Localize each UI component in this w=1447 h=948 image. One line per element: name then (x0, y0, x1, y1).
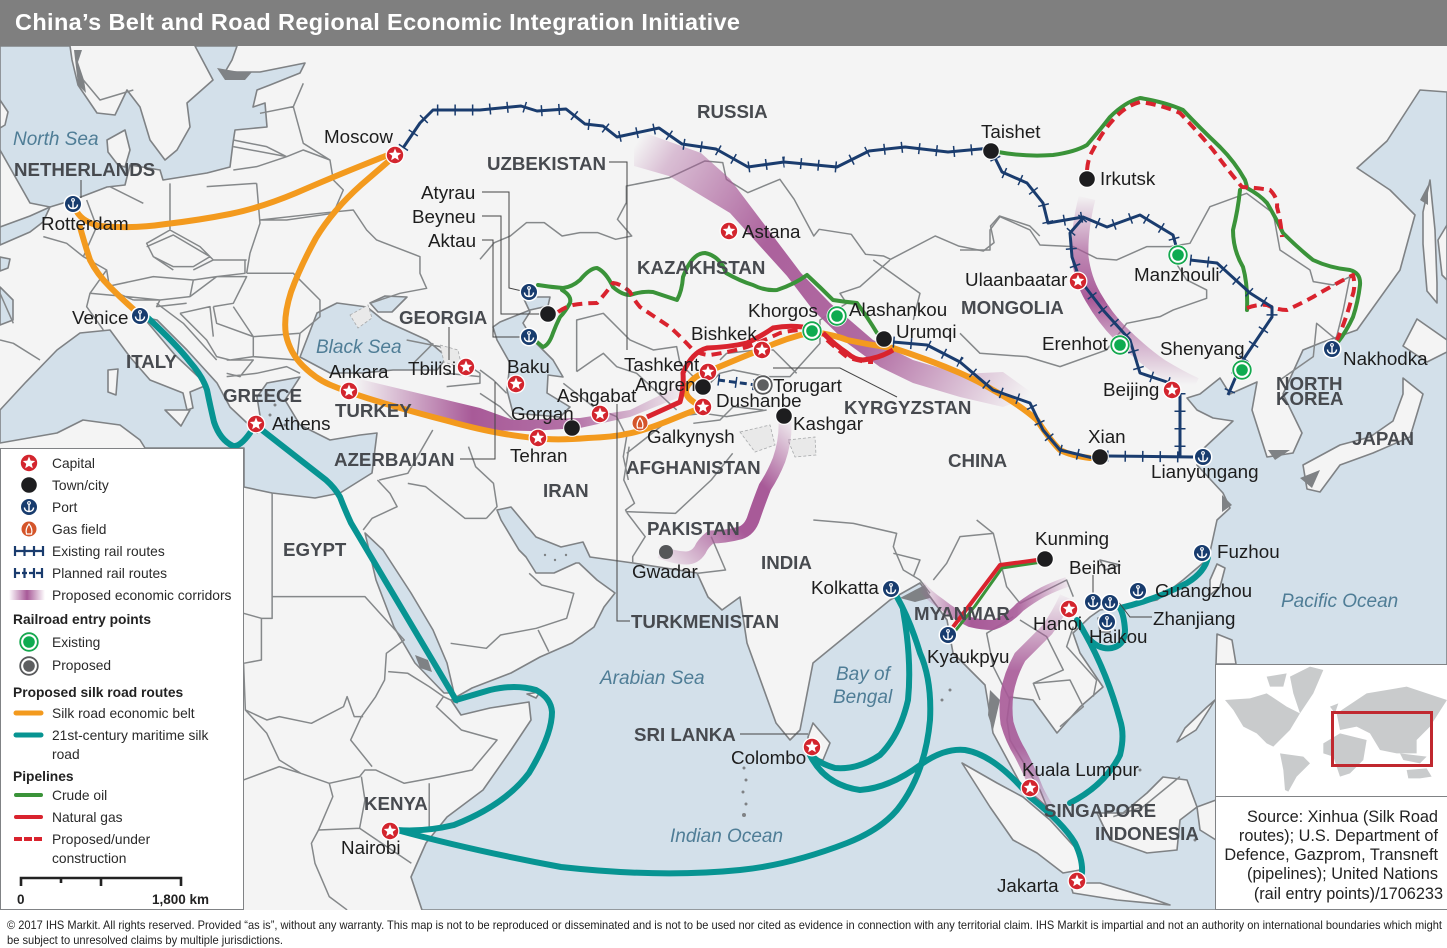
source text: Source: Xinhua (Silk Road (1247, 808, 1438, 826)
natural gas pipelines (647, 326, 1037, 627)
legend item: natural gas (16, 810, 123, 825)
port markers (64, 194, 1342, 644)
country labels: MONGOLIA (961, 297, 1064, 318)
country labels: NETHERLANDS (14, 159, 155, 180)
country borders: South-East Asia (813, 520, 1180, 817)
proposed pipelines (558, 102, 1354, 362)
legend item: crude oil: Crude oil (52, 788, 107, 803)
city labels: Atyrau (421, 182, 475, 203)
source text: routes); U.S. Department of (1239, 827, 1438, 845)
scale bar: 0 (17, 892, 25, 907)
city labels: Beyneu (412, 206, 476, 227)
city labels (41, 121, 1428, 896)
title bar: China’s Belt and Road Regional Economic Integration Initiative (15, 9, 740, 35)
sea labels: Arabian Sea (599, 668, 705, 689)
source text: (pipelines); United Nations (1247, 865, 1438, 883)
city labels: Galkynysh (647, 426, 735, 447)
legend heading: railroad entry points: Railroad entry points (13, 612, 151, 627)
leader lines (81, 162, 1152, 734)
city labels: Aktau (428, 230, 476, 251)
city labels: Kashgar (793, 413, 863, 434)
legend item: proposed entry point (18, 656, 111, 676)
corridor: Kolkata to Kunming (920, 582, 1067, 625)
country labels: JAPAN (1352, 428, 1414, 449)
country labels: AFGHANISTAN (626, 457, 761, 478)
city labels: Tehran (510, 445, 567, 466)
legend item: capital (20, 454, 95, 472)
city labels: Zhanjiang (1153, 608, 1236, 629)
legend item: maritime silk road: 21st-century maritime silk (52, 728, 209, 743)
country labels: IRAN (543, 480, 589, 501)
city labels: Kuala Lumpur (1022, 759, 1139, 780)
country labels: KAZAKHSTAN (637, 257, 765, 278)
city labels: Ankara (329, 361, 389, 382)
source text: (rail entry points)/1706233 (1254, 885, 1443, 903)
country labels: INDONESIA (1095, 823, 1199, 844)
city labels: Moscow (324, 126, 393, 147)
country labels: ITALY (126, 351, 177, 372)
city labels: Kolkatta (811, 577, 879, 598)
city labels: Gwadar (632, 561, 698, 582)
sea labels: Indian Ocean (670, 826, 783, 847)
city labels: Urumqi (896, 321, 957, 342)
country labels: EGYPT (283, 539, 347, 560)
source text: Defence, Gazprom, Transneft (1224, 846, 1438, 864)
legend item: proposed economic corridors: Proposed economic corridors (52, 588, 232, 603)
legend item: crude oil (16, 788, 107, 803)
city labels: Baku (507, 356, 550, 377)
country labels (14, 101, 1414, 844)
city labels: Fuzhou (1217, 541, 1280, 562)
sea labels: Pacific Ocean (1281, 591, 1398, 612)
economic corridors (355, 129, 1195, 808)
city labels: Manzhouli (1134, 264, 1220, 285)
legend item: proposed pipeline: Proposed/under (52, 832, 151, 847)
city labels: Erenhot (1042, 333, 1109, 354)
city labels: Kunming (1035, 528, 1109, 549)
city labels: Nairobi (341, 837, 400, 858)
city labels: Jakarta (997, 875, 1059, 896)
legend item: gas field: Gas field (52, 522, 106, 537)
city labels: Beijing (1103, 379, 1159, 400)
world locator map (1225, 667, 1447, 792)
21st-century maritime silk road (148, 318, 1208, 873)
legend item: natural gas: Natural gas (52, 810, 123, 825)
legend item: port: Port (52, 500, 77, 515)
country labels: NORTH (1276, 373, 1342, 394)
city labels: Torugart (773, 375, 843, 396)
city labels: Hanoi (1033, 613, 1082, 634)
city labels: Irkutsk (1100, 168, 1156, 189)
silk road economic belt (77, 153, 1090, 458)
legend item: existing entry point (18, 632, 100, 652)
country labels: KENYA (364, 793, 428, 814)
corridor: Russia to China (634, 129, 1035, 407)
legend item: proposed pipeline: construction (52, 851, 126, 866)
city labels: Taishet (981, 121, 1041, 142)
country labels: AZERBAIJAN (334, 449, 454, 470)
country labels: KOREA (1276, 388, 1344, 409)
country labels: KYRGYZSTAN (844, 397, 971, 418)
city labels: Xian (1088, 426, 1126, 447)
country labels: INDIA (761, 552, 812, 573)
sea labels: North Sea (13, 129, 99, 150)
icon: gas field (632, 414, 648, 432)
country labels: SRI LANKA (634, 724, 736, 745)
city labels: Astana (742, 221, 801, 242)
source text (1224, 808, 1443, 903)
city labels: Athens (272, 413, 330, 434)
city labels: Ashgabat (557, 385, 637, 406)
existing rail routes (403, 106, 1272, 458)
city labels: Shenyang (1160, 338, 1245, 359)
legend item: proposed entry point: Proposed (52, 658, 111, 673)
city labels: Beihai (1069, 557, 1121, 578)
country labels: CHINA (948, 450, 1007, 471)
city labels: Ulaanbaatar (965, 269, 1067, 290)
legend item: maritime silk road: road (52, 747, 80, 762)
legend item: silk road economic belt: Silk road economic belt (52, 706, 195, 721)
country labels: TURKMENISTAN (631, 611, 779, 632)
legend item: maritime silk road (16, 728, 209, 762)
railroad entry points (752, 244, 1252, 396)
city labels: Khorgos (748, 300, 818, 321)
city labels: Lianyungang (1151, 461, 1259, 482)
city labels: Guangzhou (1155, 580, 1252, 601)
legend item: planned rail routes: Planned rail routes (52, 566, 167, 581)
city labels: Tbilisi (408, 358, 456, 379)
country labels: GREECE (223, 385, 302, 406)
legend item: town or city (20, 476, 109, 494)
city labels: Dushanbe (716, 390, 802, 411)
legend item: capital: Capital (52, 456, 95, 471)
legend item: town or city: Town/city (52, 478, 109, 493)
legend heading: pipelines: Pipelines (13, 769, 74, 784)
planned rail route (718, 380, 756, 385)
country borders: Middle East and Africa (244, 430, 733, 910)
panel: locator map and source (1216, 664, 1447, 910)
scale bar: 1,800 km (152, 892, 209, 907)
town and city markers (539, 142, 1109, 568)
corridor: Ulaanbaatar to Beijing (1080, 198, 1195, 386)
legend item: existing entry point: Existing (52, 635, 100, 650)
sea labels: Bay of (836, 664, 892, 685)
footer disclaimer (0, 910, 1447, 948)
city labels: Nakhodka (1343, 348, 1428, 369)
city labels: Alashankou (849, 299, 947, 320)
country borders: Mongolia and north-east China (960, 193, 1350, 380)
city labels: Tashkent (624, 354, 700, 375)
city labels: Gorgan (511, 403, 574, 424)
footer disclaimer: be subject to unresolved claims by multiple jurisdictions. (7, 933, 283, 947)
city labels: Bishkek (691, 323, 757, 344)
city labels: Angren (635, 374, 696, 395)
crude oil pipelines (537, 98, 1360, 630)
city labels: Venice (72, 307, 128, 328)
locator red frame (1332, 712, 1432, 766)
legend item: proposed pipeline (14, 832, 151, 866)
sea labels: Black Sea (316, 337, 402, 358)
corridor: Hanoi to Singapore (1006, 597, 1066, 808)
city labels: Rotterdam (41, 213, 129, 234)
city labels: Kyaukpyu (927, 646, 1009, 667)
disputed hatched zones (350, 305, 816, 457)
country labels: UZBEKISTAN (487, 153, 606, 174)
panel: legend (0, 448, 244, 910)
country labels: MYANMAR (914, 603, 1010, 624)
country labels: PAKISTAN (647, 518, 740, 539)
corridor: Kashgar to Gwadar (660, 420, 785, 558)
country borders: Central Asia (480, 161, 1040, 259)
sea labels: Bengal (833, 687, 893, 708)
country borders: Europe (0, 80, 480, 387)
sea labels (13, 129, 1398, 847)
country labels: SINGAPORE (1044, 800, 1156, 821)
country labels: TURKEY (335, 400, 412, 421)
capital markers (246, 146, 1182, 890)
scale bar (17, 878, 209, 907)
dense coastline patches (74, 50, 1428, 842)
country labels: GEORGIA (399, 307, 487, 328)
legend heading: proposed silk road routes: Proposed silk road routes (13, 685, 184, 700)
legend item: port (20, 498, 77, 516)
country borders: Kazakhstan south to Iran (480, 260, 920, 480)
legend item: gas field (22, 522, 106, 537)
country labels: RUSSIA (697, 101, 768, 122)
corridor: Ankara to Tashkent (355, 378, 690, 431)
legend item: existing rail routes: Existing rail routes (52, 544, 165, 559)
city labels: Colombo (731, 747, 806, 768)
city labels: Haikou (1089, 626, 1147, 647)
title bar (0, 0, 1447, 46)
